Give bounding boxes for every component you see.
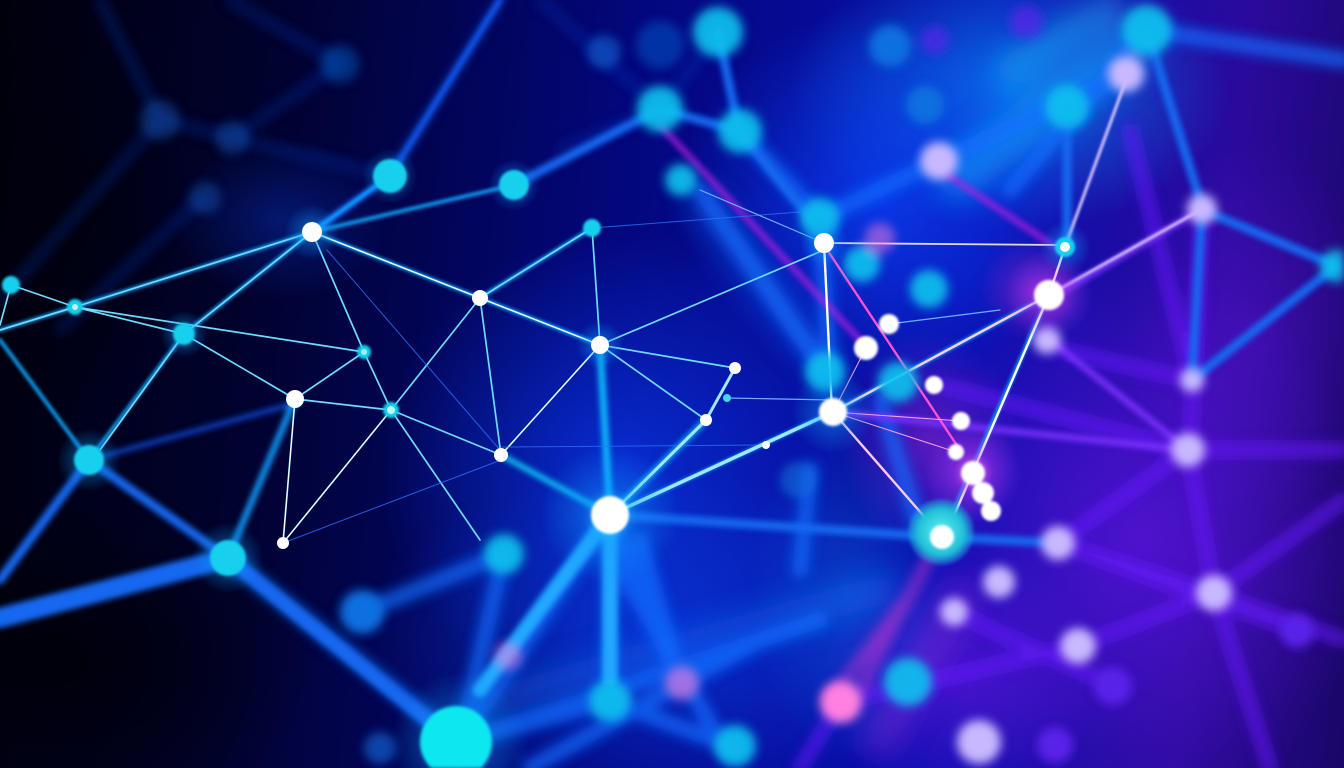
cyan mid nodes	[2, 159, 1075, 576]
sharp left network lines	[0, 228, 824, 543]
large glow halos	[57, 148, 1094, 768]
bright lower-right lines	[824, 243, 1065, 537]
soft light streaks	[500, 10, 1135, 740]
white nodes	[72, 222, 1070, 549]
bright connecting lines	[0, 80, 1202, 543]
large cyan base node	[420, 499, 974, 768]
faint thin lines	[283, 212, 800, 543]
cyan glow under lines	[0, 176, 1049, 537]
